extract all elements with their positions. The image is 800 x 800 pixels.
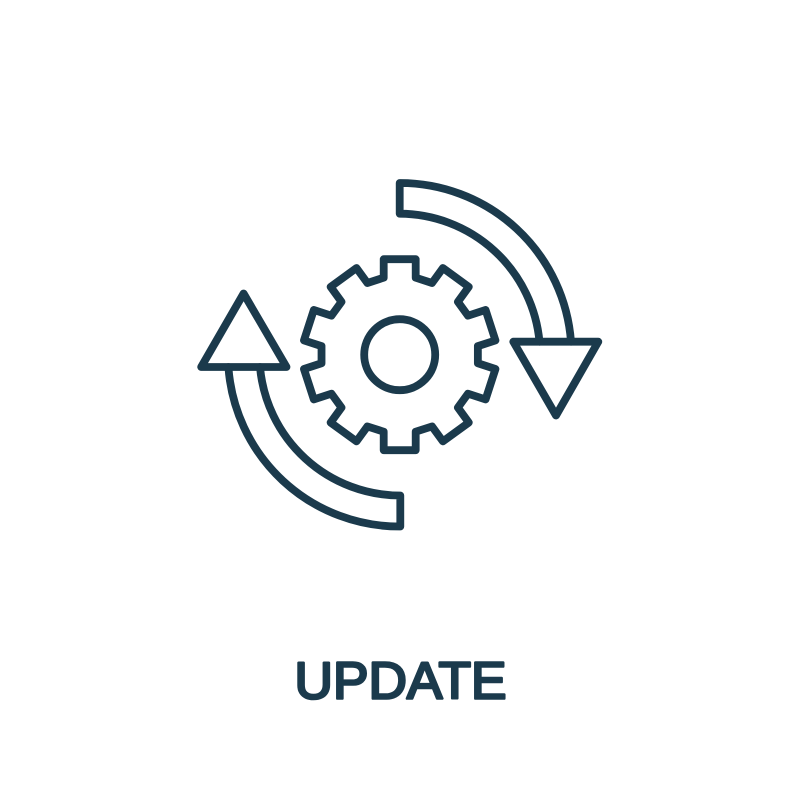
icon: gear: [304, 259, 495, 450]
arrow: clockwise top right: [400, 183, 598, 416]
title: UPDATE: [294, 653, 506, 711]
arrow: clockwise bottom left: [201, 294, 400, 527]
